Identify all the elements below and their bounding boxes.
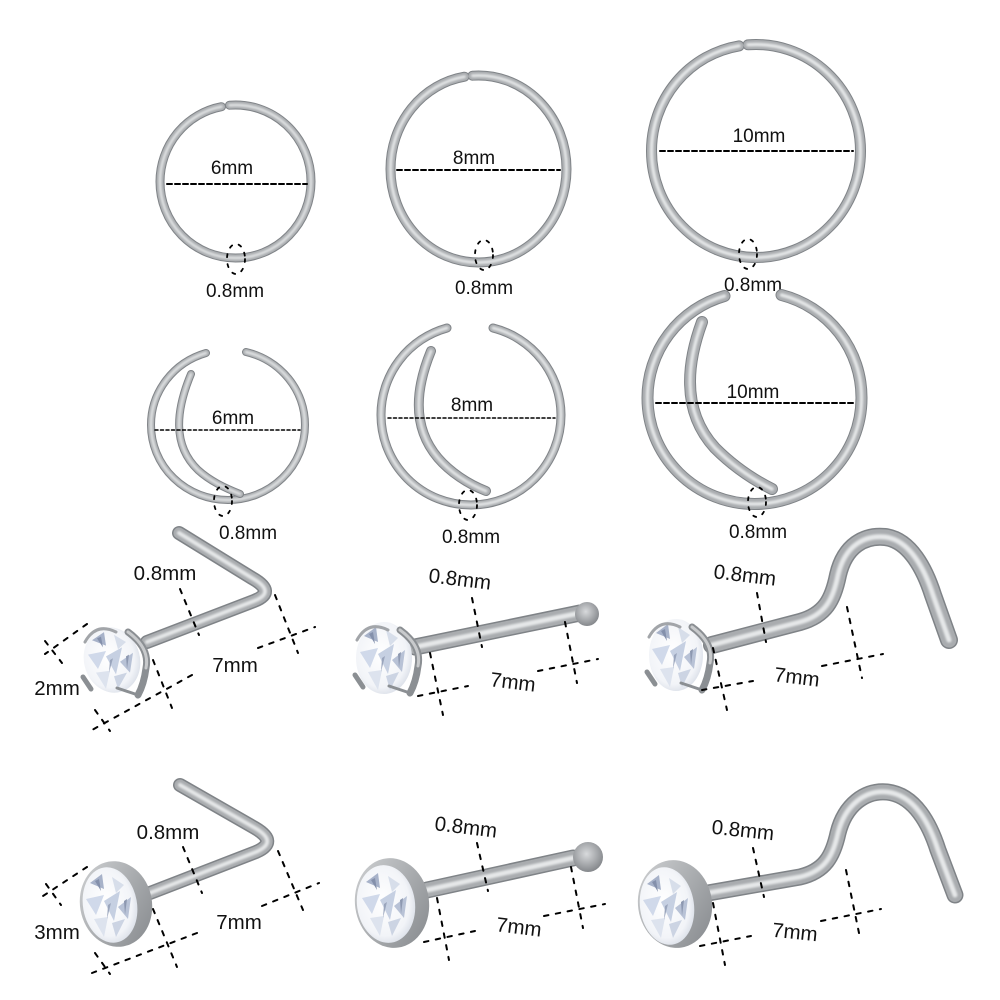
L-bend pin, bezel 3mm: 3mm	[34, 921, 80, 944]
moon ring 8mm	[381, 328, 561, 548]
moon ring 6mm: 0.8mm	[219, 523, 277, 544]
ring 8mm: 8mm	[453, 148, 495, 169]
straight pin, prong 2mm	[355, 564, 599, 715]
ring 8mm	[390, 75, 566, 299]
ring 10mm: 10mm	[733, 126, 785, 147]
L-bend pin, bezel 3mm: 0.8mm	[137, 821, 199, 844]
straight pin, bezel 3mm: 7mm	[495, 913, 543, 942]
moon ring 8mm: 8mm	[451, 395, 493, 416]
ring 6mm: 0.8mm	[206, 281, 264, 302]
straight pin, bezel 3mm: 0.8mm	[433, 812, 498, 843]
moon ring 6mm	[151, 352, 305, 544]
screw pin, prong 2mm: 7mm	[773, 663, 821, 692]
ring 6mm	[160, 105, 311, 302]
ring 6mm: 6mm	[211, 158, 253, 179]
moon ring 8mm: 0.8mm	[442, 527, 500, 548]
screw pin, bezel 3mm: 0.8mm	[711, 816, 775, 845]
moon ring 6mm: 6mm	[212, 408, 254, 429]
straight pin, prong 2mm: 0.8mm	[427, 564, 492, 595]
screw pin, bezel 3mm	[632, 792, 955, 965]
screw pin, prong 2mm: 0.8mm	[712, 560, 777, 591]
L-bend pin, prong 2mm: 7mm	[212, 654, 258, 677]
L-bend pin, prong 2mm	[34, 533, 315, 731]
screw pin, bezel 3mm: 7mm	[771, 919, 819, 946]
L-bend pin, prong 2mm: 2mm	[34, 677, 80, 700]
straight pin, prong 2mm: 7mm	[489, 668, 537, 697]
moon ring 10mm	[647, 295, 862, 543]
ring 8mm: 0.8mm	[455, 278, 513, 299]
moon ring 10mm: 10mm	[727, 382, 779, 403]
moon ring 10mm: 0.8mm	[729, 522, 787, 543]
straight pin, bezel 3mm	[349, 812, 605, 960]
L-bend pin, bezel 3mm: 7mm	[216, 911, 262, 934]
ring 10mm	[652, 44, 860, 296]
screw pin, prong 2mm	[647, 537, 949, 710]
ring 10mm: 0.8mm	[724, 275, 782, 296]
L-bend pin, bezel 3mm	[34, 785, 319, 974]
L-bend pin, prong 2mm: 0.8mm	[134, 562, 196, 585]
